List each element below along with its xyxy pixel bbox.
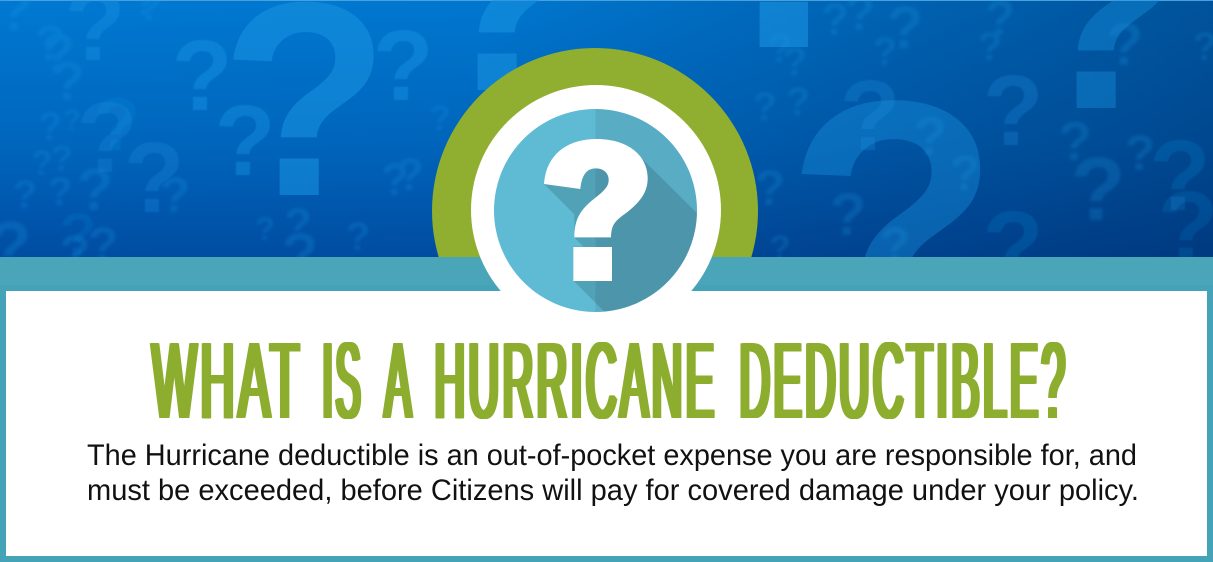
panel: blue question mark background: ?: [372, 10, 434, 122]
panel: blue question mark background: ?: [381, 154, 409, 205]
panel: blue question mark background: ?: [160, 167, 190, 223]
panel: blue question mark background: ?: [60, 201, 96, 268]
panel: blue question mark background: ?: [284, 199, 312, 250]
icon: question mark badge: [494, 109, 697, 312]
icon: white ring of badge: [471, 85, 721, 335]
teal band: [0, 257, 1213, 291]
title: [152, 320, 1069, 442]
panel: blue question mark background: ?: [31, 144, 53, 183]
panel: blue question mark background: ?: [1071, 140, 1125, 240]
icon: green ring behind badge: [432, 48, 758, 374]
panel: blue question mark background: ?: [346, 215, 370, 259]
panel: blue question mark background: ?: [77, 156, 113, 223]
panel: blue question mark background: ?: [1149, 120, 1211, 232]
panel: blue question mark background: ?: [785, 27, 1001, 421]
panel: blue question mark background: ?: [282, 221, 318, 288]
panel: blue question mark background: ?: [769, 229, 791, 268]
panel: blue question mark background: ?: [255, 211, 275, 247]
panel: blue question mark background: ?: [880, 217, 910, 273]
panel: blue question mark background: ?: [783, 40, 807, 84]
panel: blue question mark background: ?: [753, 85, 777, 129]
panel: blue question mark background: ?: [913, 105, 947, 167]
panel: blue question mark background: ?: [76, 82, 138, 194]
panel: blue question mark background: ?: [41, 22, 75, 84]
panel: blue question mark background: ?: [978, 25, 1002, 69]
panel: blue question mark background: ?: [768, 27, 792, 71]
panel: blue question mark background: ?: [1107, 11, 1143, 78]
panel: blue question mark background: ?: [94, 82, 140, 166]
panel: blue question mark background: ?: [123, 122, 185, 234]
panel: white text card with teal border: [3, 288, 1210, 559]
title: IS: [323, 320, 364, 442]
panel: blue question mark background: ?: [755, 160, 785, 216]
title: WHAT: [152, 320, 304, 442]
panel: blue question mark background: ?: [396, 149, 424, 200]
panel: blue question mark background: ?: [1125, 125, 1155, 181]
panel: blue question mark background: ?: [35, 15, 65, 71]
panel: blue question mark background: ?: [171, 20, 233, 132]
panel: blue question mark background: ?: [60, 225, 90, 281]
panel: blue question mark background: ?: [982, 55, 1044, 167]
panel: blue question mark background: ?: [830, 181, 866, 248]
panel: blue question mark background: ?: [88, 217, 118, 273]
panel: blue question mark background: ?: [48, 170, 72, 214]
panel: blue question mark background: ?: [13, 173, 37, 217]
panel: blue question mark background: ?: [839, 60, 901, 172]
panel: blue question mark background: ?: [1058, 110, 1092, 172]
panel: blue question mark background: ?: [429, 99, 451, 138]
panel: blue question mark background: ?: [63, 104, 81, 137]
text block: definition: must be exceeded, before Citizens will pay for covered damage under your policy.: [87, 474, 1139, 507]
title: A: [385, 320, 415, 442]
panel: blue question mark background: ?: [950, 145, 980, 201]
panel: blue question mark background: ?: [214, 85, 276, 197]
title: HURRICANE: [435, 320, 718, 442]
panel: blue question mark background: [0, 0, 1213, 257]
panel: blue question mark background: ?: [38, 105, 62, 149]
text block: definition: [87, 439, 1139, 507]
panel: blue question mark background: ?: [786, 80, 810, 124]
panel: blue question mark background: ?: [873, 30, 897, 74]
panel: blue question mark background: ?: [982, 191, 1044, 303]
text block: definition: The Hurricane deductible is an out-of-pocket expense you are responsible for, and: [87, 439, 1137, 472]
panel: blue question mark background: ?: [51, 50, 85, 112]
panel: blue question mark background: ?: [51, 139, 73, 178]
